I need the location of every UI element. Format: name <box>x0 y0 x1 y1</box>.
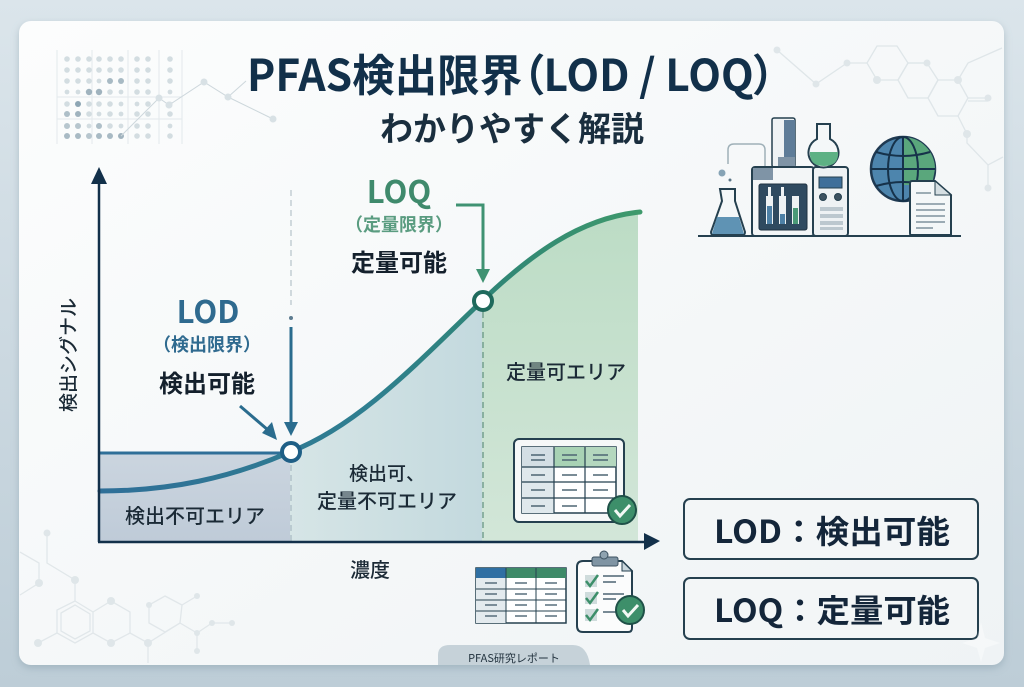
baseline <box>100 452 282 454</box>
LOD callout: （検出限界） <box>153 331 261 357</box>
LOQ guide line <box>482 312 484 541</box>
chart: signal vs concentration: 検出可、 <box>349 459 425 486</box>
zone: detectable, not quantifiable <box>290 301 482 541</box>
icon: data table <box>476 568 566 623</box>
LOQ callout: LOQ <box>367 167 431 212</box>
control panel <box>813 167 848 236</box>
footer tab: PFAS研究レポート <box>468 650 560 666</box>
decoration: data dot grid top left <box>57 50 182 144</box>
icon: laboratory equipment <box>698 118 961 236</box>
LOQ callout: 定量可能 <box>351 243 447 278</box>
summary box: LOQ <box>684 578 978 639</box>
zone labels: 検出不可エリア <box>125 500 265 529</box>
LOD callout: LOD <box>177 287 239 332</box>
chart: signal vs concentration <box>54 167 660 583</box>
icon: globe and document <box>871 137 951 235</box>
title: わかりやすく解説 <box>380 102 644 151</box>
sparkle <box>962 622 1000 662</box>
decoration: molecule bottom left <box>20 530 235 663</box>
decoration: molecule top right <box>774 46 1003 192</box>
LOQ callout <box>345 167 492 310</box>
flask <box>711 189 745 235</box>
column <box>772 118 795 167</box>
summary box: LOD <box>684 499 978 559</box>
round flask <box>809 124 838 168</box>
chart: signal vs concentration: 定量可エリア <box>506 356 626 385</box>
signal curve <box>100 212 640 491</box>
y axis label: 検出シグナル <box>54 298 81 412</box>
LOQ callout: （定量限界） <box>345 211 453 237</box>
LOD callout <box>153 287 300 461</box>
footer tab <box>438 645 590 666</box>
instrument body <box>752 167 814 236</box>
LOD callout: 検出可能 <box>159 364 255 399</box>
icon: checklist clipboard <box>577 551 644 632</box>
summary box: LOQ: LOQ：定量可能 <box>714 586 950 632</box>
decoration: line graph top left <box>121 78 276 136</box>
chart: signal vs concentration: 定量不可エリア <box>317 485 457 514</box>
x axis label: 濃度 <box>350 554 390 583</box>
title: PFAS検出限界（LOD / LOQ） <box>247 40 775 104</box>
LOD guide line <box>290 190 292 305</box>
zone: quantifiable <box>482 212 638 541</box>
axes <box>91 167 660 550</box>
zone: not detectable <box>100 452 290 541</box>
icon: results table <box>514 439 636 524</box>
summary box: LOD: LOD：検出可能 <box>714 507 950 553</box>
title <box>247 40 775 151</box>
